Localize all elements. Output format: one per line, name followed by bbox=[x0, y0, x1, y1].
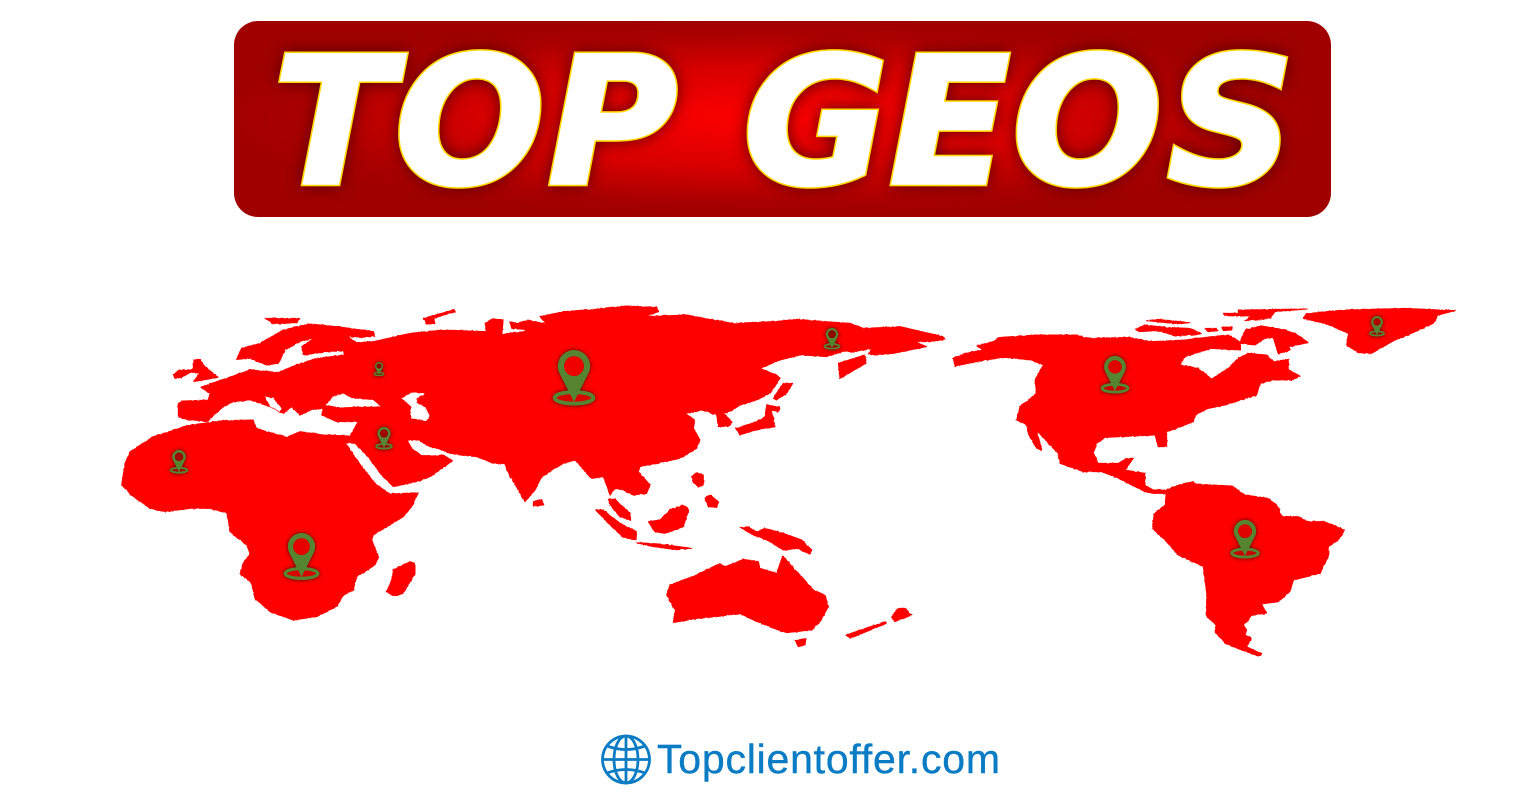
title banner bbox=[234, 20, 1331, 225]
world map bbox=[122, 306, 1455, 656]
pin: Middle East bbox=[376, 427, 392, 449]
icon: globe bbox=[602, 736, 650, 783]
pin: North America bbox=[1102, 356, 1128, 392]
landmass: eastern Asia, Indonesia, Australia bbox=[500, 306, 945, 647]
landmass: Africa and western Eurasia bbox=[122, 310, 550, 620]
pin: South America bbox=[1232, 520, 1258, 557]
title: TOP GEOS: TOP GEOS bbox=[274, 20, 1294, 225]
pin: Russia bbox=[555, 350, 593, 404]
pin: eastern Siberia bbox=[825, 328, 839, 349]
title: TOP GEOS: TOP GEOS bbox=[274, 20, 1294, 225]
location pins bbox=[171, 316, 1384, 578]
pin: West Africa bbox=[171, 450, 187, 473]
pin: Greenland bbox=[1370, 316, 1384, 336]
pin: Eastern Europe bbox=[374, 362, 384, 375]
pin: southern Africa bbox=[285, 533, 318, 578]
website address: Topclientoffer.com bbox=[657, 736, 1000, 782]
website footer bbox=[602, 736, 1000, 783]
banner background bbox=[234, 21, 1331, 217]
landmass: the Americas and Greenland bbox=[953, 308, 1455, 656]
